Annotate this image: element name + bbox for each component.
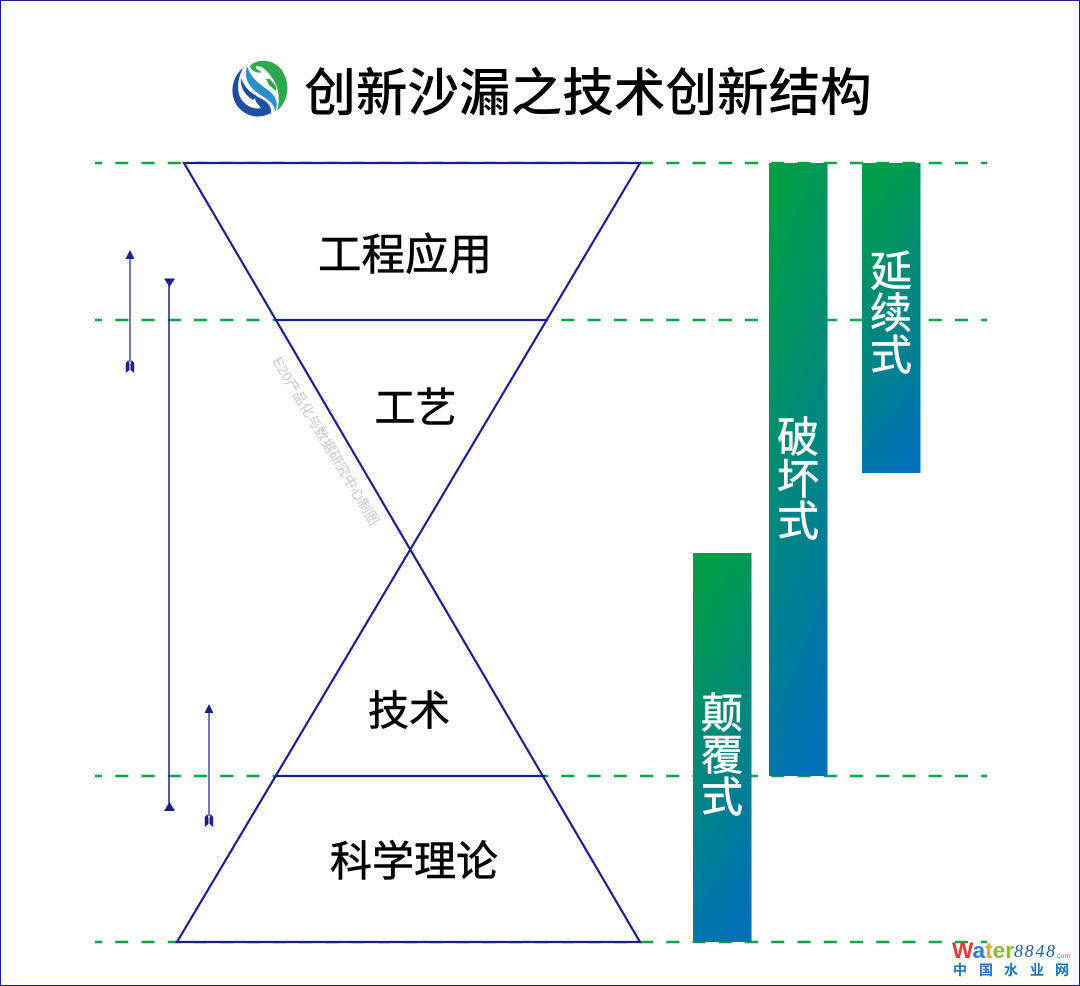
watermark: E20产品化与数据研究中心制图 xyxy=(269,354,383,528)
bar: destructive: 破 xyxy=(777,414,819,461)
bar: sustaining xyxy=(862,163,920,473)
bar: destructive: 坏 xyxy=(777,456,819,503)
title: 创新沙漏之技术创新结构 xyxy=(304,64,872,122)
source logo: water8848: 网 xyxy=(1055,962,1069,978)
source logo: water8848: 国 xyxy=(979,962,993,978)
bar: sustaining: 式 xyxy=(870,332,912,379)
hourglass diagram xyxy=(177,163,640,942)
label: engineering application: 工程应用 xyxy=(318,232,492,280)
bar: destructive: 式 xyxy=(777,498,819,545)
bar: disruptive: 颠 xyxy=(701,690,743,737)
bar: disruptive: 式 xyxy=(701,774,743,821)
bar: disruptive xyxy=(693,553,752,942)
logo icon xyxy=(232,61,287,116)
label: scientific theory: 科学理论 xyxy=(330,838,498,885)
bar: disruptive: 覆 xyxy=(701,732,743,779)
source logo: water8848: .com xyxy=(1055,953,1070,960)
label: technology: 技术 xyxy=(368,688,450,734)
source logo: water8848: Water xyxy=(952,938,1014,963)
arrow: upper up arrow xyxy=(126,250,134,373)
source logo: water8848: 中 xyxy=(953,962,967,978)
source logo: water8848: 水 xyxy=(1004,962,1018,978)
arrow: lower up arrow xyxy=(204,704,214,827)
source logo: water8848: 业 xyxy=(1030,962,1044,978)
bar: sustaining: 延 xyxy=(870,248,912,295)
source logo: water8848: 8848 xyxy=(1014,941,1055,961)
label: process: 工艺 xyxy=(374,385,456,431)
source logo: water8848 xyxy=(952,938,1070,978)
arrow: long double-head arrow xyxy=(164,278,175,811)
bar: sustaining: 续 xyxy=(870,290,912,337)
bar: destructive xyxy=(769,163,828,776)
